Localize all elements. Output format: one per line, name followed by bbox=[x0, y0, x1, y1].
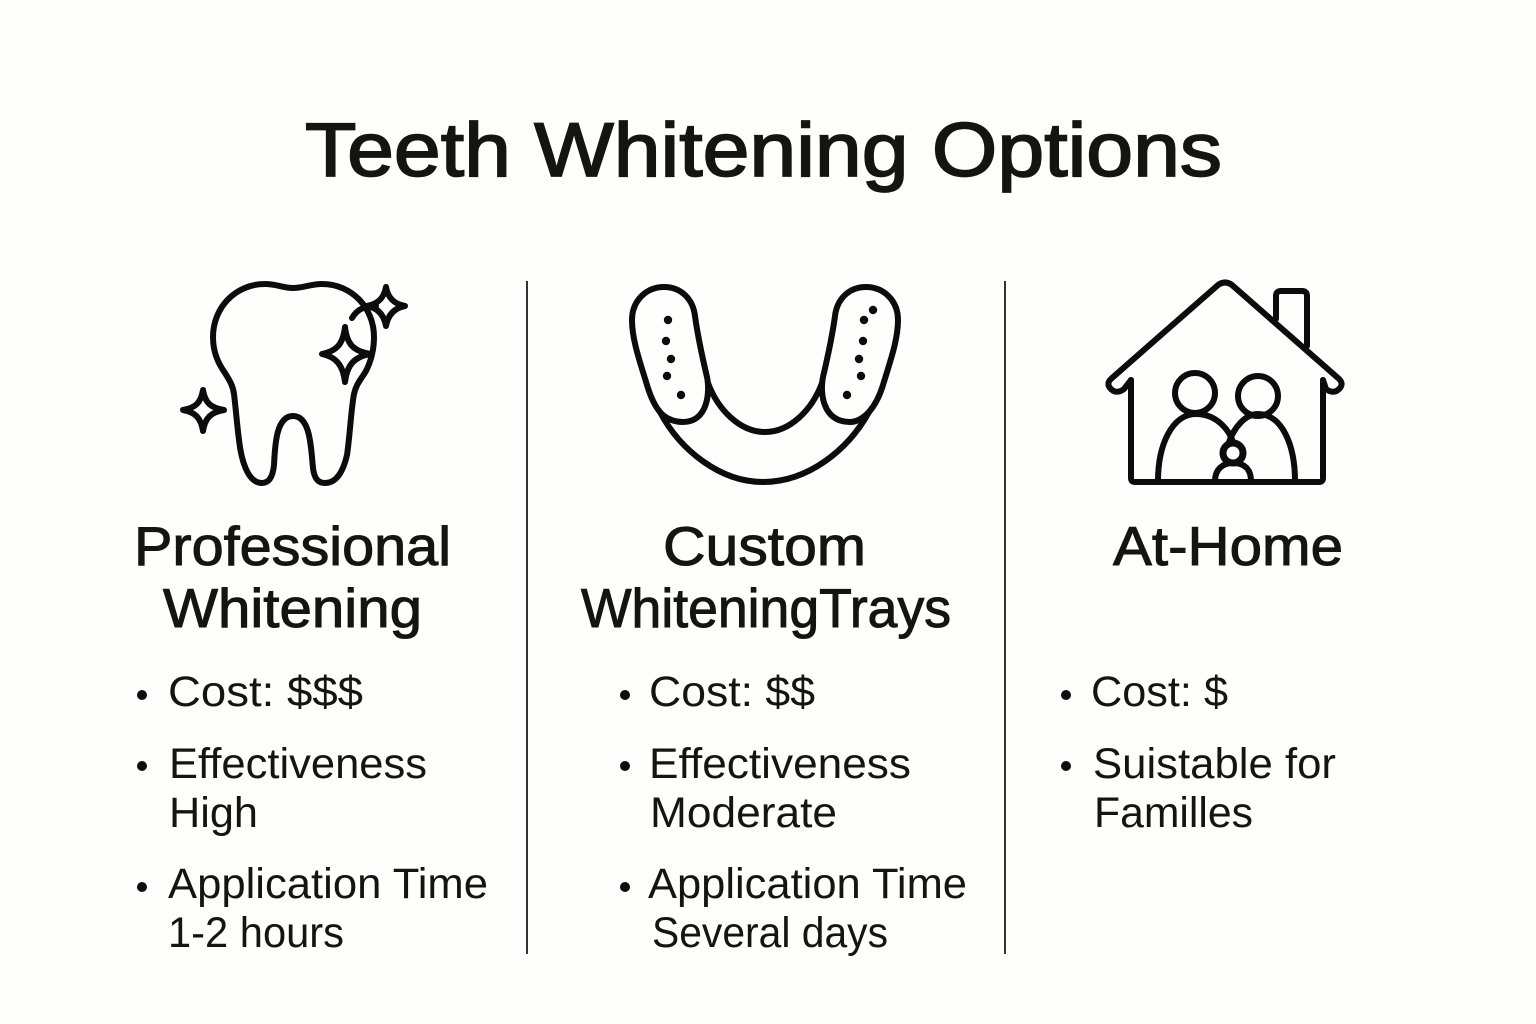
list: custom trays details bbox=[620, 668, 967, 957]
list: custom trays details: Effectiveness bbox=[649, 740, 911, 788]
panel: custom whitening trays bbox=[581, 287, 967, 957]
list: custom trays details: Cost: $$ bbox=[649, 668, 815, 716]
heading: custom whitening trays: Custom bbox=[663, 515, 866, 577]
icon: tooth with sparkles bbox=[183, 284, 405, 483]
list: professional whitening details: Cost: $$$ bbox=[168, 668, 363, 716]
list: at-home details: Familles bbox=[1094, 789, 1253, 837]
panel: at-home bbox=[1061, 282, 1343, 837]
icon: house with family bbox=[1108, 282, 1342, 482]
list: at-home details: Suistable for bbox=[1093, 740, 1336, 788]
panel: professional whitening bbox=[134, 284, 488, 957]
heading: custom whitening trays bbox=[581, 515, 951, 639]
list: professional whitening details bbox=[137, 668, 488, 957]
list: professional whitening details: 1-2 hours bbox=[168, 909, 344, 957]
list: professional whitening details: Application Time bbox=[168, 860, 488, 908]
list: custom trays details: Application Time bbox=[648, 860, 967, 908]
list: at-home details bbox=[1061, 668, 1336, 837]
heading: professional whitening: Whitening bbox=[163, 577, 422, 639]
icon: whitening tray bbox=[632, 287, 898, 482]
list: professional whitening details: High bbox=[169, 789, 258, 837]
heading: at-home: At-Home bbox=[1113, 515, 1343, 577]
heading: custom whitening trays: WhiteningTrays bbox=[581, 577, 951, 639]
title: Teeth Whitening Options bbox=[305, 108, 1222, 193]
list: custom trays details: Moderate bbox=[650, 789, 837, 837]
list: at-home details: Cost: $ bbox=[1091, 668, 1228, 716]
heading: professional whitening bbox=[134, 515, 451, 639]
list: professional whitening details: Effectiveness bbox=[169, 740, 427, 788]
heading: professional whitening: Professional bbox=[134, 515, 451, 577]
list: custom trays details: Several days bbox=[652, 909, 888, 957]
